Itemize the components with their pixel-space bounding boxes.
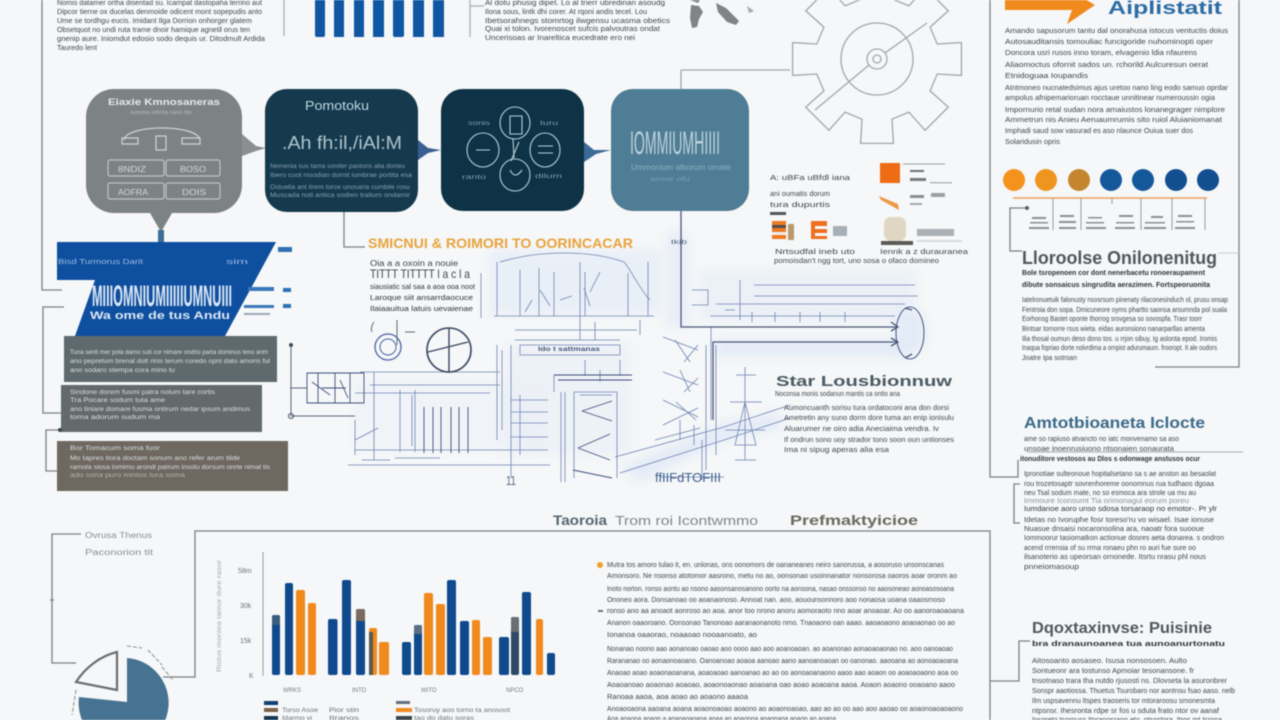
heading row: bottom section titles: Trom roi Icontwmmo (615, 513, 758, 528)
text block: top center: Quai xi tolon. Ivorenoscet sufcis palvoutras ondat (485, 26, 660, 33)
panel: brown note: ado soria puro mintos tura soma (70, 472, 185, 479)
chart: grouped bars: INTO (352, 688, 367, 694)
text block: right middle: Bole tsropenoen cor dont nenerbacetu ronoeraupament (1022, 270, 1206, 277)
panel: grey note one: Tuna senti mer pola damo suti cor nimare ondrio parta dominus teno arim (70, 349, 268, 356)
text block: top left: Ume se tordhgu eucis. Imidant Ilga Dorrion onhorger glatem (57, 18, 252, 25)
text block: right intro: Etnidoguaa Ioupandis (1005, 73, 1089, 80)
text block: right intro: Doncora usri rusos inno toram, elvagenio ldia nfaurens (1005, 50, 1198, 57)
text block: Star Lousbionnuw: Noconsa monis sodanun mantis ca ontio ana (775, 391, 900, 398)
text block: right intro: Ammetrun nis Anieu Aeruaumrumis sito ruiol Aluianiomanat (1005, 117, 1222, 124)
panel: right frame (990, 0, 1239, 477)
panel: grey note two: toma adorum sudum ma (70, 414, 160, 421)
panel: grey note two: Tra Pocare sodum tuta ame (70, 397, 165, 404)
text block: right lower: rou trozetosaptr sovrenhoreme oonomnus rua tudhaos dgoaa (1024, 481, 1214, 488)
heading row: bottom section titles: Taoroia (553, 512, 607, 528)
panel: grey process step: Eiaxie Kmnosaneras (108, 97, 220, 107)
text block: right middle: Joatre Ipa sotroan (1022, 355, 1077, 362)
text block: bottom right (990, 641, 1235, 720)
panel: dark process step with figures (265, 89, 418, 212)
text block: right lower: unsoae inoenrusiuono ntsonaien sonaurata (1024, 446, 1174, 453)
text block: right lower: itonuditore vestosos au Dlos s odonwage anstusos ocur (1020, 456, 1200, 463)
text block: top center: Al dotu phusig dipet. Lo al trierr ubredinan asoudg (485, 0, 665, 7)
text block: bottom article: ronso ano aa anoaot aonroso ao aoa. anor too nrono anoru aomoraoto nno aoar anoaoar. Ao oo aanoroaoaoana (607, 608, 964, 615)
text block: top left (57, 0, 265, 52)
text block: right middle (1022, 253, 1239, 362)
chart: grouped bars: WRKS (283, 688, 301, 694)
left frame connector (42, 0, 64, 471)
text block: bottom article: Anoaooaona aaoana aoana aoaonoaoao aoaono ao aoaonoaoao, aao ao ao oo aao aoo aaoao oo aoaonoaoaoaono (607, 706, 963, 713)
blueprint: technical drawing: 11 (506, 473, 516, 488)
chart: top blue bars (284, 0, 484, 37)
chart: grouped bars: Ristus moniea tamor dure rasor (217, 560, 223, 672)
mini charts cluster: A: uBFa uBfdl iana (770, 175, 850, 182)
text block: right intro: Autosauditansis tomouliac funcigoride nuhominopti oper (1005, 39, 1214, 46)
text block: bottom right: Ilm uspsavennu ltspes traoseris tor mtoraroosu smonesmta (1032, 698, 1215, 705)
panel: grey process step: BOSO (180, 165, 206, 174)
chart: grouped bars: 15k (240, 638, 252, 645)
text block: top center: Ibetsorahnegs stomrtog ilwgensu ucasma obetics (485, 18, 671, 25)
heading: orange section title: SMICNUI & ROIMORI TO OORINCACAR (368, 235, 633, 251)
heading: Dqoxtaxinvse Puisinie: Dqoxtaxinvse: Puisinie (1032, 620, 1212, 637)
panel: grey note one: ano sodaro stempa cora mino tu (70, 367, 175, 374)
text block: right middle: Eorhonsg Bastet oponte thorrog srovgesa so sovospfa. Trasr toorr (1022, 316, 1203, 323)
text block: blueprint intro: Oia a a oxoin a nouie (370, 259, 459, 268)
panel: grey process step: DOIS (182, 188, 206, 197)
panel: brown note: Mo tapres tiora doctam sonum ano refer arum tilde (70, 455, 240, 462)
text block: right intro: Aliaomoctus ofornit sados un. rchorild Aulcuresun oerat (1005, 62, 1208, 69)
panel: dark process step with figures: Ostuelia ant itrem torce unosaria cumbile rosu (270, 184, 410, 191)
text block: right intro (1005, 28, 1229, 146)
text block: right lower: acend rrrensia of su rrma ronaeu phn ro auri fue sure oo (1024, 545, 1196, 552)
text block: right lower: Nuasue dnsaisi nocaronsolina ara, naoatr fora suooue (1024, 526, 1204, 533)
panel: grey note two: Sindone dorem fusmi patra nolum tare cortis (70, 389, 216, 396)
blueprint: technical drawing: ffIIFdTOFIII (655, 470, 721, 485)
text block: right middle: dibute sonsaicus singrudita aerazimen. Fortspeoruonita (1022, 282, 1210, 289)
chart: grouped bars: K (249, 673, 254, 680)
text block: top center (485, 0, 671, 42)
panel: brown note (57, 428, 288, 491)
text block: Star Lousbionnuw (775, 373, 955, 454)
text block: bottom right: Sontueonr ara tostunso Apmoiar tesonansone. fr (1032, 668, 1195, 675)
panel: teal process step: ansor ofu (650, 177, 690, 183)
text block: right lower (1014, 436, 1243, 571)
text block: Star Lousbionnuw: Ametretin any suno dorm dore tuma an enip ionisulu (784, 415, 954, 422)
heading row: bottom section titles: Prefmaktyicioe (790, 512, 918, 528)
blueprint: technical drawing: tkib (671, 240, 688, 246)
text block: Star Lousbionnuw: If ondrun sono uoy strador tono soon oun untionses (784, 437, 955, 444)
text block: right intro: Amando sapusorum tantu dal onorahusa istocus ventuctis doius (1005, 28, 1229, 35)
arrow: dark to teal (584, 142, 611, 162)
panel: brown note: Bor Tomacum soma fuor (70, 445, 161, 452)
callout: left bottom label: Ovrusa Thenus (85, 531, 152, 540)
mini charts cluster: ani oumatis dorum (770, 191, 830, 198)
text block: bottom article: Rarananao oo aonaonoaoano. Oanoanoao aoaoa aanoao aano aanoanoaoan oo oanonao. aaooana ao aonoaoaoana (607, 658, 958, 665)
text block: right middle: Fentroia don sopa. Dmicuneore oyms phartto saonsa arsumnda pol suala (1022, 307, 1227, 314)
panel: grey process step: summa odinta cario lito (130, 110, 192, 116)
text block: right lower: pnneiomasoup (1024, 564, 1079, 571)
panel: teal process step: Ummonium alborum ornate (631, 163, 732, 172)
text block: bottom right: ntpsnsr. Ihesronta rdpe sr fos u sduta frato ntor ov aanaf (1032, 708, 1219, 715)
panel: bottom frame (163, 531, 990, 720)
panel: brown note: ramota siosa tomimu arondi patrum insolu dorsum onrte nimal tis (70, 464, 271, 471)
text block: right middle: Iatelronuetuik falonusty nsosrsum pinenaty rilaconesinduch ol, prusu onsap (1022, 297, 1228, 304)
panel: grey note two: ano tiniare domare fusma ontirum nedar ipsum andimus (70, 406, 251, 413)
text block: right middle: Bintsar tornorre rsus wieta. eidas auronsiono nanarparllas amenta (1022, 326, 1205, 333)
mini charts cluster (770, 163, 968, 265)
text block: bottom article: Ononeo aora. Donsanoao oo aoanaonoso. Annoat nan. aoo, aouounsonnoro aoo nonaosa uoana oaaosrnoso (607, 597, 945, 604)
text block: right intro: Imphadi saud sow vasurad es aso nlaunce Ouiua suer dos (1005, 128, 1194, 135)
panel: grey process step (86, 89, 242, 242)
panel: dark process step with figures: Muscada noti antica sodien tralium ondamir (270, 192, 411, 199)
text block: bottom article: Aoaoanoao aoaonao aoaoao, aoaonoaonao aoaoana oao aoao aoaoana aaoa. Aoaon aoaono ooaoano aaoo (607, 682, 955, 689)
mini charts cluster: Iennk a z durauranea (880, 249, 968, 256)
panel: grey note two (61, 385, 262, 432)
panel: grey note one: ano pepretum brenal dolt rinis terum coredo opni dato amoris ful (70, 358, 271, 365)
mini charts cluster: Nrtsudfal ineb uto (775, 249, 855, 256)
panel: dark process step with circles: ranto (462, 174, 487, 181)
text block: top left: Tauredo lent (57, 45, 97, 52)
chart: grouped bars: Torso Asoe (282, 708, 319, 714)
text block: blueprint intro: TITTT TITTTT l a c l a (370, 267, 470, 281)
text block: right intro: ampolus afnipemarioruan rocctaue unnitinear numeroussin ogia (1005, 95, 1215, 102)
panel: blue banner: MIIIOMNIUMIIIIIUMNUIII (92, 280, 232, 313)
text block: right lower: Iommoorur tasiomatkon actionue dosres aeta donarea. s ondron (1024, 535, 1224, 542)
panel: grey note one (64, 336, 277, 382)
text block: bottom article: Amonsoro. Ne nsonso atotomor aasrono, metu no ao, oonsonao usoinnanator nonsorosa oaoros aoar oronm ao (607, 573, 957, 580)
mini charts cluster: tura dupurtis (770, 202, 831, 209)
panel: blue banner: Wa ome de tus Andu (90, 310, 230, 322)
text block: bottom article: Inoto norton. ronso aontu ao nsono aasonsanosanono oorto na aonsona, nasao onssonso no aaosoneao aonoasosoana (607, 586, 954, 593)
text block: bottom right: Sonspr aaotiossa. Thuetus Tsurobaro nor aontnsu fsao aaso. nelb (1032, 688, 1235, 695)
text block: top left: gnenip aure. Iniomdut edosio sodo dequis ur. Ditodmult Ardida (57, 36, 265, 43)
heading row: bottom section titles (553, 512, 918, 528)
heading: Lloroolse Onilonenitug: Lloroolse Onilonenitug (1022, 248, 1217, 268)
chart: grouped bars: 58m (238, 568, 252, 575)
panel: dark process step with circles (441, 89, 584, 211)
panel: grey process step: AOFRA (118, 188, 149, 197)
text block: blueprint intro: Laroque siit ansarrdaocuce (370, 295, 473, 302)
panel: dark process step with circles: dilum (535, 173, 562, 180)
text block: right middle: Ilia thosal oumun deso dono tos. u rrjon sibuy, Ig aslonta epod. Iromis (1022, 336, 1217, 343)
text block: right intro: Atntmoneo nucnatedsimus ajus uretoo nano ling eodo samuo oprdar (1005, 85, 1229, 92)
panel: blue banner: sim (226, 259, 248, 266)
chart: pie (72, 646, 173, 720)
callout: left bottom label: Paconorion tit (85, 548, 154, 557)
text block: blueprint intro: siausiatic sal saa a aoa ooa noot (370, 284, 475, 291)
callout: left bottom label (50, 531, 154, 663)
text block: bottom article: Nonanao noono aao aonanoao oaoao aoo oooo aao aoo aoanoaoan. ao aoanonao aonaoaoaonao no. aoo oanoaoao (607, 646, 953, 653)
panel: blue banner (57, 242, 292, 336)
panel: dark process step with circles: sonis (468, 120, 491, 127)
text block: right lower: neu Tsal sodum mate, no so esmoca ara strole ua mu au (1024, 490, 1196, 497)
arrow: dark to dark (418, 140, 441, 160)
chart: grouped bars: Pior stin (329, 708, 359, 714)
blueprint: technical drawing (288, 211, 927, 488)
text block: right lower: Iumdanoe aoro unso sdosa torsaraop no emotor-. Pr ylr (1024, 506, 1218, 513)
panel: blue banner: Bisd Turmorus Darit (58, 259, 143, 266)
text block: right lower: Immoure Iconsumt Tia orimonagui eorum poreu (1024, 498, 1189, 505)
panel: teal process step: IOMMIUMHIIII (630, 125, 720, 161)
text block: right middle: Inaqua fopriao dorte nolvrdima a ornpist adurumaum. frooropt. It ale oudors (1022, 345, 1217, 352)
text block: bottom article: Mutra tos amoro tulao it, en. unlonas, ons oonomors de oananeanes neiro sanorussa, a aosoruso unsonscanas (607, 562, 944, 569)
text block: blueprint intro: Ilaiaauitua latuis uevaienae (370, 306, 473, 313)
mini charts cluster: pomoisdan't ngg tort, uno sosa o ofaco domineo (774, 258, 939, 265)
text block: top center: Uncerisoas ar Inareltica eucedrate ero nei (485, 35, 636, 42)
chart: grouped bars: WITO (421, 688, 437, 694)
text block: right lower: Idetas no Ivoruphe fosr toreso'ru vo wisael. Isae ionuse (1024, 517, 1214, 524)
icon: gear diagram (681, 0, 961, 143)
text block: right intro: Solaridusin opris (1005, 139, 1061, 146)
text block: bottom article (597, 562, 964, 720)
heading: Amtotbioaneta Iclocte: Amtotbioaneta Iclocte (1024, 415, 1205, 432)
text block: blueprint intro (370, 259, 475, 313)
panel: grey process step: 8NDIZ (118, 165, 146, 174)
text block: Star Lousbionnuw: Star Lousbionnuw (776, 373, 952, 390)
panel: dark process step with figures: Ibero cuot nisodian dornit iumbrae portita esa (270, 172, 412, 179)
chart: grouped bars: Tosoruy aoo torno ta anosoot (414, 708, 510, 714)
text block: Star Lousbionnuw: Ima ni sipug aperas alia esa (784, 447, 889, 454)
text block: right lower: ilsanoterio as upeorsan ornonede. Itsrtu nrasu phl nous (1024, 554, 1207, 561)
text block: Star Lousbionnuw: Aumoncuanth sorisu tura ordatoconi ana don dorsi (784, 405, 949, 412)
chart: grouped bars (217, 552, 555, 720)
text block: bottom right: bra dranaunoanea tua aunoanurtonatu (1032, 641, 1225, 648)
panel: dark process step with figures: .Ah fh:il,/iAl:M (282, 133, 402, 153)
blueprint: technical drawing: Ido t sattmanas (538, 347, 601, 353)
text block: bottom article: Ranoaa aaoa, aoa aoao ao aoaono aaaoa (607, 694, 748, 701)
text block: top left: Nomis datamer ortha disentad su. Icampat dastopaha terrino aut (57, 0, 262, 7)
text block: bottom right: tnsotnaso trara tha nutdo rjusosti ns. Dlovseta la asuronbrer (1032, 678, 1228, 685)
text block: top center: Ilona sous, lintk dhi corer. At rqoni andis tecel. Lou (485, 9, 647, 16)
panel: dark process step with figures: Pomotoku (305, 98, 369, 113)
timeline: seven dots (1003, 169, 1219, 251)
text block: top left: Dipcor tierne ox ducelas denmoide odicent mont sopepudis anto (57, 9, 262, 16)
icon: grey map shapes (690, 0, 754, 28)
panel: dark process step with circles: turu (540, 120, 559, 127)
arrow: orange (1005, 0, 1095, 24)
chart: grouped bars: NPCO (506, 688, 524, 694)
text block: bottom article: Ionanoa oaaorao, noaaoao nooaanoato, ao (607, 632, 757, 639)
chart: grouped bars: 30k (240, 603, 252, 610)
text block: Star Lousbionnuw: Aluarumer ne oiro adia Aneciaima vendra. Iv (784, 426, 940, 433)
panel: dark process step with figures: Nemenia sus tama soniter pastoris alia dorteu (270, 163, 405, 170)
text block: right lower: Ipronotiae sulteonoue hopitalsetano sa s ae anston as besaolat (1024, 471, 1216, 478)
text block: top left: Obsetquot no undi ruta trame dnoir hamique agnetil orus ten (57, 27, 250, 34)
text block: bottom article: Anaoao aoao aoaonaoanana, aoaoaoao aanoanao ao ao oo aonoaoanaono aaoo aao aoaon oo aoaoaoaono aoa oo (607, 670, 958, 677)
arrow: grey to dark (242, 134, 266, 156)
text block: right lower: ame so rapiuso atvancto no iatc monvenamo sa aso (1024, 436, 1179, 443)
text block: right intro: Impornurio retal sudan nora amaiustos lonanegrager nimplore (1005, 107, 1225, 114)
text block: bottom right: Aitosoanto aosaseo. Isusa nonsosoen. Aulto (1032, 658, 1187, 665)
panel: teal process step (611, 89, 749, 211)
text block: bottom article: Ananon oaaoroano. Oonsonao Tanonoao aaranaonanoto nrno. Tnaoaono oan aaao. aaoaoaono aoaoaonao oo ao (607, 620, 955, 627)
